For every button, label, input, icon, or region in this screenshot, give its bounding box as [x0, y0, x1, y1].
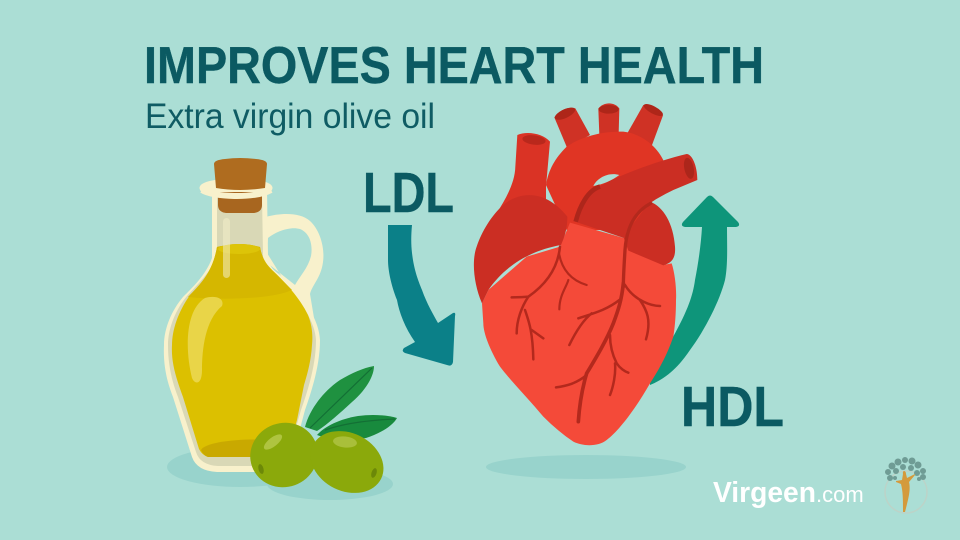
bottle glass: [164, 190, 320, 472]
olive 1: [241, 413, 327, 497]
label: HDL: HDL: [681, 375, 784, 439]
icon: olive oil bottle: [164, 158, 323, 472]
vessel edge: [576, 187, 600, 222]
pulmonary opening: [682, 157, 696, 180]
highlight: body: [188, 297, 223, 383]
shadow: bottle: [167, 447, 313, 487]
arrow: HDL up: [650, 196, 739, 385]
label: LDL: LDL: [363, 161, 454, 225]
arch gap: [593, 174, 619, 186]
branch 2: [598, 103, 619, 135]
subtitle: Extra virgin olive oil: [145, 97, 435, 136]
body of heart: [482, 223, 676, 445]
shadow: olives: [267, 468, 393, 500]
aortic arch: [546, 132, 664, 230]
leaf 2: [317, 415, 397, 440]
figure: [896, 471, 915, 512]
tree canopy: [885, 457, 926, 481]
logo text: Virgeen.com: [713, 477, 864, 509]
rim back: [202, 181, 270, 195]
olive 1 spot: [257, 464, 265, 474]
icon: anatomical heart: [474, 102, 697, 445]
neck glass: [168, 195, 316, 466]
logo emblem: [885, 457, 927, 513]
superior vena cava: [497, 133, 550, 213]
branch 3: [628, 105, 663, 146]
oil shading upper: [188, 244, 292, 299]
left atrium: [474, 195, 567, 303]
oil surface: [218, 244, 260, 254]
lower cork: [218, 192, 262, 213]
oil bottom shade: [201, 439, 291, 457]
bottle handle: [262, 214, 323, 318]
shadow: heart: [486, 455, 686, 479]
leaf veins: [310, 368, 395, 430]
upper cork: [214, 158, 267, 190]
branch 3 opening: [642, 102, 664, 118]
olive 2 spot: [370, 467, 378, 479]
oil: [172, 244, 312, 457]
arrow: LDL down: [388, 225, 455, 366]
branch 1: [554, 108, 590, 148]
leaf 1: [305, 366, 374, 431]
rim front: [202, 190, 271, 196]
olive 2: [300, 419, 394, 505]
title: IMPROVES HEART HEALTH: [144, 37, 764, 95]
icon: olives and leaves: [241, 366, 397, 505]
branch 2 opening: [599, 105, 619, 114]
highlight: neck: [223, 218, 230, 278]
coronary veins: [512, 203, 660, 422]
ring: [885, 471, 927, 513]
vena cava opening: [522, 134, 546, 146]
olive 2 highlight: [332, 435, 358, 449]
pulmonary artery: [575, 154, 697, 238]
branch 1 opening: [553, 105, 577, 122]
right atrium: [623, 202, 675, 265]
olive 1 highlight: [262, 432, 284, 452]
